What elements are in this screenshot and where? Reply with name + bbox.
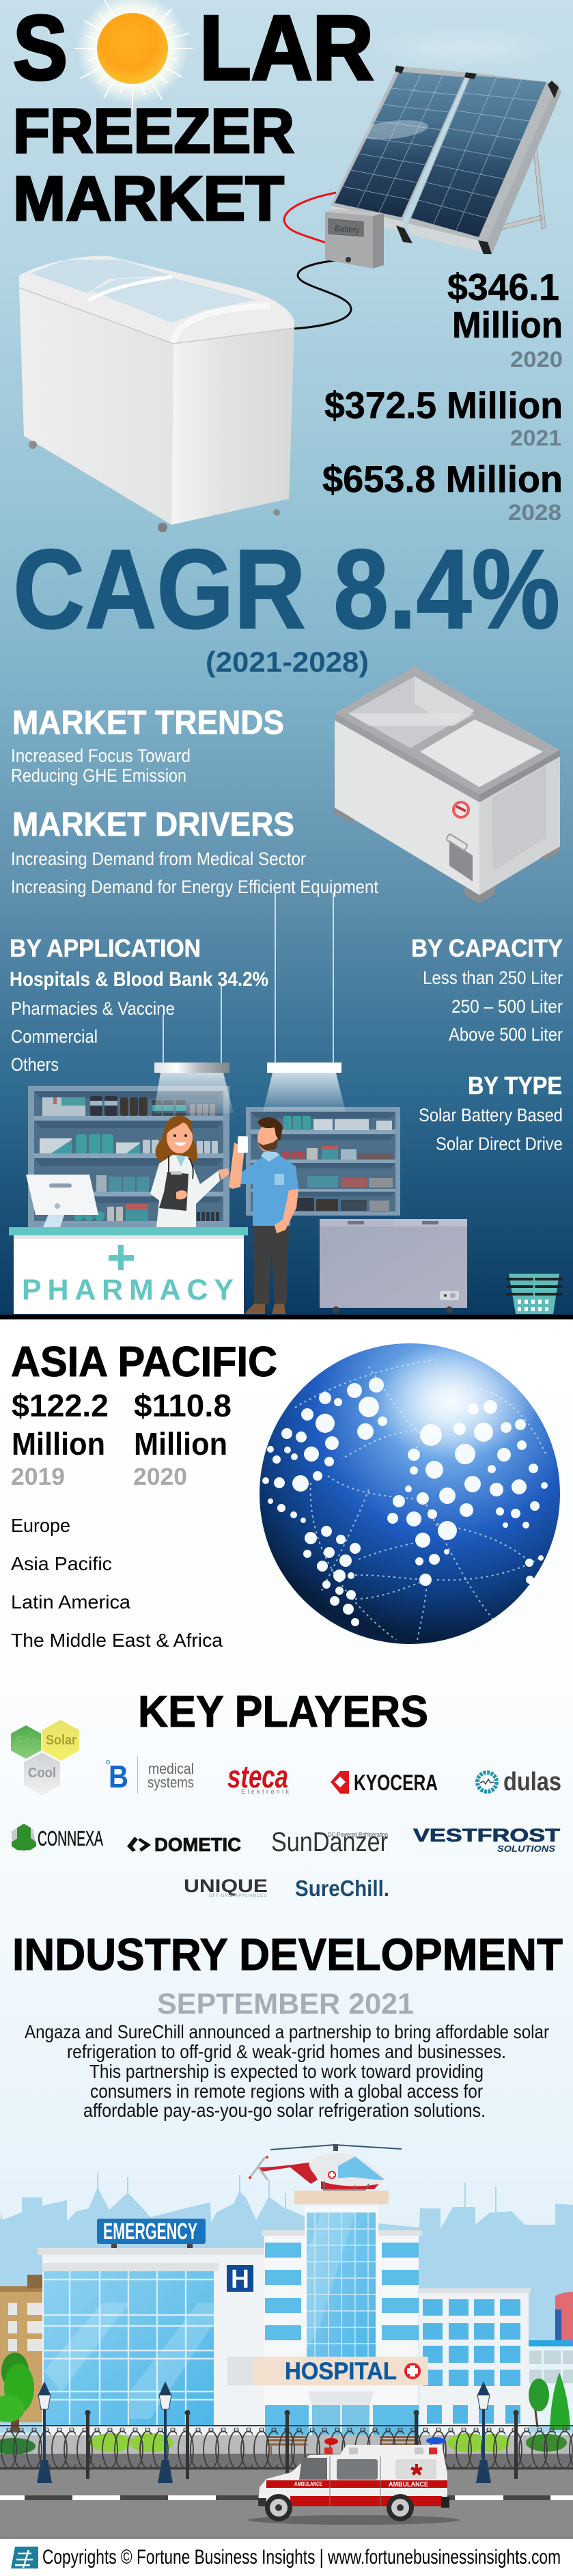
logo: sundanzer: SunDanzer [271, 1827, 388, 1857]
logo: B medical systems: systems [148, 1774, 194, 1791]
ambulance: AMBULANCE [389, 2481, 428, 2489]
logo: sundanzer: DC-Powered Refrigeration [328, 1831, 388, 1838]
continent light dots [262, 1378, 548, 1626]
icon: plus [109, 1245, 134, 1270]
logo: B medical systems: B [109, 1759, 128, 1794]
asia pacific 2020 value [133, 1388, 232, 1490]
by type [419, 1071, 563, 1154]
title: S [13, 0, 68, 99]
figure: pharmacist [150, 1116, 229, 1227]
blue hero background [0, 0, 573, 1315]
ornamental fence [0, 2410, 573, 2479]
logo: eco solar cool: Eco [16, 1734, 38, 1749]
asia pacific 2019 value: 2019 [11, 1464, 65, 1490]
ceiling lamps [154, 1063, 341, 1073]
market drivers items: Increasing Demand from Medical Sector [11, 849, 306, 869]
shelf right [246, 1107, 400, 1216]
left wing hospital building [38, 2248, 264, 2435]
asia pacific 2020 value: 2020 [133, 1464, 187, 1490]
icon: red wire [284, 193, 336, 243]
logo: eco solar cool: Cool [28, 1766, 56, 1781]
helicopter [249, 2144, 402, 2190]
regions list: Latin America [11, 1591, 130, 1613]
footer [0, 2538, 573, 2576]
by capacity [411, 934, 563, 1045]
logo: B medical systems [107, 1756, 194, 1794]
logo: unique: OFF-GRID APPLIANCES [209, 1894, 266, 1898]
ambulance wheels [265, 2494, 414, 2521]
light cones [154, 1073, 346, 1113]
icon: white chest freezer [19, 256, 294, 532]
right background buildings [529, 2292, 573, 2425]
left brown building [0, 2275, 42, 2422]
heading: market trends: MARKET TRENDS [12, 704, 284, 741]
by application: Hospitals & Blood Bank 34.2% [10, 968, 268, 991]
by application: Pharmacies & Vaccine [11, 998, 175, 1019]
logo: dulas: dulas [503, 1768, 561, 1796]
ambulance: AMBULANCE [294, 2481, 323, 2487]
market value 2021: 2021 [510, 426, 561, 450]
icon: solar panels [331, 66, 561, 254]
benches [266, 2436, 416, 2456]
logo: surechill: SureChill. [295, 1876, 389, 1901]
development body text: affordable pay-as-you-go solar refrigeration solutions. [83, 2100, 486, 2121]
date heading: SEPTEMBER 2021 [157, 1988, 414, 2020]
by capacity: BY CAPACITY [411, 934, 563, 962]
logo: vestfrost: VESTFROST [413, 1825, 561, 1846]
asia pacific heading: ASIA PACIFIC [11, 1339, 277, 1386]
helipad [294, 2191, 389, 2204]
asia pacific 2020 value: $110.8 [134, 1388, 232, 1423]
development body text: consumers in remote regions with a global access for [90, 2081, 483, 2102]
battery label: Battery [335, 223, 360, 235]
hospital sign [227, 2357, 428, 2385]
title: MARKET [13, 164, 284, 234]
title: FREEZER [13, 96, 294, 166]
market drivers items: Increasing Demand for Energy Efficient Equipment [11, 877, 378, 897]
logo: dulas [477, 1768, 561, 1796]
market value 2021 [324, 384, 563, 450]
shelf right products [281, 1116, 393, 1211]
logo: steca: Elektronik [241, 1788, 290, 1795]
basket [506, 1274, 563, 1314]
logo: kyocera: KYOCERA [354, 1770, 438, 1795]
development body text: This partnership is expected to work toward providing [89, 2061, 484, 2082]
market trends items [11, 745, 191, 786]
city skyline [0, 2173, 573, 2433]
figure: customer [229, 1117, 298, 1314]
regions list [11, 1515, 223, 1651]
development body text [25, 2021, 549, 2121]
by capacity: 250 – 500 Liter [451, 996, 563, 1017]
icon: black wire [294, 260, 351, 329]
by application [10, 934, 268, 1075]
market value 2028: $653.8 Million [322, 458, 563, 500]
logo: kyocera [331, 1770, 438, 1795]
asia pacific 2019 value: Million [12, 1426, 105, 1462]
computer monitor [26, 1175, 98, 1227]
asia pacific 2019 value [11, 1388, 109, 1490]
sidewalk and road [0, 2435, 573, 2538]
asia pacific 2019 value: $122.2 [12, 1388, 109, 1423]
counter [9, 1227, 248, 1314]
market value 2028 [322, 458, 563, 525]
white lower background [0, 1319, 573, 2543]
shelf left products [40, 1096, 219, 1221]
central hospital building [227, 2191, 428, 2445]
regions list: Europe [11, 1515, 70, 1536]
CAGR period: (2021-2028) [206, 646, 369, 678]
market value 2021: $372.5 Million [324, 384, 563, 426]
logo: eco solar cool: Solar [46, 1733, 76, 1748]
shelf left [28, 1086, 229, 1227]
icon: Fortune Business Insights logo [11, 2547, 38, 2568]
logo: unique: UNIQUE [184, 1876, 268, 1896]
section divider bar [0, 1315, 573, 1319]
asia pacific 2020 value: Million [134, 1426, 227, 1462]
logo: eco solar cool [11, 1720, 79, 1796]
emergency sign: EMERGENCY [103, 2219, 197, 2245]
logo: B medical systems: medical [148, 1760, 194, 1777]
logo: connexa [12, 1824, 103, 1852]
icon: isometric freezer [335, 666, 560, 903]
by application: Commercial [11, 1026, 98, 1047]
icon: sun [74, 0, 193, 110]
market drivers items [11, 849, 378, 897]
logo: vestfrost [413, 1825, 561, 1854]
icon: H sign: H [231, 2265, 249, 2294]
hospital entrance [308, 2392, 374, 2445]
hospital tower [305, 2206, 378, 2358]
right wing building [419, 2288, 531, 2435]
logo: vestfrost: SOLUTIONS [497, 1844, 555, 1854]
ambulance [248, 2437, 460, 2525]
hospital sign: HOSPITAL [285, 2358, 397, 2385]
network dashed lines [295, 1360, 546, 1643]
icon: battery box [325, 209, 384, 269]
logo: dometic: DOMETIC [154, 1834, 241, 1855]
globe [260, 1343, 560, 1644]
key players heading: KEY PLAYERS [138, 1686, 428, 1736]
emergency sign [97, 2219, 206, 2248]
trees and bushes [0, 2353, 570, 2454]
title [13, 0, 374, 234]
lamp cords [163, 892, 333, 1063]
market value 2020 [447, 266, 563, 372]
market value 2020: Million [452, 305, 563, 346]
market value 2028: 2028 [508, 500, 561, 525]
pharmacy label: PHARMACY [22, 1274, 234, 1306]
faint clouds [362, 26, 567, 70]
logo: steca: steca [227, 1759, 288, 1794]
regions list: The Middle East & Africa [11, 1630, 223, 1651]
development body text: refrigeration to off-grid & weak-grid homes and businesses. [67, 2041, 506, 2062]
market value 2020: 2020 [510, 347, 563, 372]
regions list: Asia Pacific [11, 1553, 112, 1574]
by application: BY APPLICATION [10, 934, 201, 962]
chest freezer front view [320, 1219, 467, 1313]
market trends items: Reducing GHE Emission [11, 765, 186, 786]
heading: market drivers: MARKET DRIVERS [12, 806, 294, 843]
logo: connexa: CONNEXA [38, 1826, 103, 1850]
by type: BY TYPE [468, 1071, 562, 1099]
market value 2020: $346.1 [447, 266, 559, 308]
market trends items: Increased Focus Toward [11, 745, 191, 766]
by application: Others [11, 1054, 59, 1075]
street lamps [37, 2381, 491, 2483]
title: LAR [199, 0, 374, 99]
